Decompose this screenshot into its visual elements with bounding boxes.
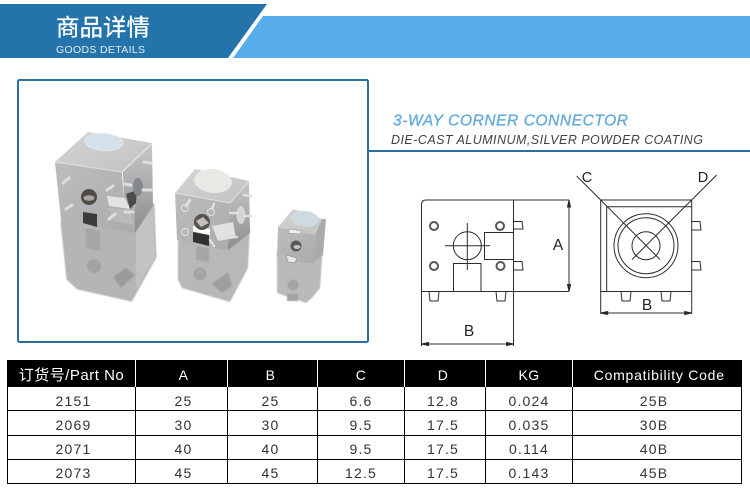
dimension B arrow bbox=[601, 312, 692, 314]
specification table: 25B bbox=[640, 393, 668, 409]
specification table: 25 bbox=[174, 393, 192, 409]
medium connector bbox=[175, 167, 251, 250]
specification table: 40 bbox=[174, 441, 192, 457]
small connector bbox=[277, 209, 326, 263]
label A: A bbox=[553, 237, 564, 254]
specification table: Compatibility Code bbox=[594, 367, 725, 383]
specification table: 6.6 bbox=[349, 393, 373, 409]
body outline bbox=[601, 200, 692, 292]
label B: B bbox=[464, 323, 474, 340]
heading: product name: 3-WAY CORNER CONNECTOR bbox=[393, 112, 628, 130]
pins bbox=[429, 222, 523, 301]
specification table: 17.5 bbox=[427, 465, 459, 481]
body outline bbox=[422, 200, 514, 292]
specification table: 12.5 bbox=[345, 465, 377, 481]
large connector bbox=[55, 132, 153, 233]
label D: D bbox=[698, 170, 708, 186]
specification table: 2151 bbox=[56, 393, 91, 409]
dimension B arrow bbox=[422, 342, 514, 346]
specification table: 30B bbox=[640, 417, 668, 433]
specification table: 25 bbox=[262, 393, 279, 409]
inner edges bbox=[607, 207, 692, 292]
centre crosshair bbox=[445, 223, 490, 270]
specification table: C bbox=[356, 367, 366, 383]
dimension A arrow bbox=[568, 200, 570, 292]
concentric circles bbox=[614, 214, 678, 278]
specification table: 45 bbox=[262, 465, 279, 481]
specification table: 0.114 bbox=[509, 441, 549, 457]
mounting holes bbox=[430, 222, 504, 270]
specification table: 30 bbox=[262, 417, 279, 433]
specification table: 45B bbox=[640, 465, 668, 481]
dark blue title bar bbox=[0, 4, 267, 58]
specification table bbox=[7, 360, 742, 484]
leader lines C and D bbox=[577, 175, 717, 260]
specification table: 12.8 bbox=[427, 393, 459, 409]
extension lines bbox=[601, 292, 692, 314]
specification table: 2071 bbox=[56, 441, 91, 457]
specification table: 45 bbox=[174, 465, 192, 481]
specification table: A bbox=[179, 367, 188, 383]
label B top view: B bbox=[642, 297, 652, 314]
specification table: 0.024 bbox=[508, 393, 550, 409]
centre hole bbox=[453, 232, 481, 260]
specification table: KG bbox=[518, 367, 540, 383]
small connector reflection bbox=[277, 245, 323, 303]
large connector reflection bbox=[62, 205, 155, 300]
specification table: 0.143 bbox=[508, 465, 550, 481]
diagram: top view bbox=[577, 175, 717, 314]
specification table: 9.5 bbox=[349, 417, 373, 433]
panel frame bbox=[18, 80, 368, 342]
diagram: side view bbox=[422, 200, 570, 346]
label C: C bbox=[582, 170, 592, 186]
specification table: D bbox=[438, 367, 448, 383]
specification table: 17.5 bbox=[427, 417, 459, 433]
specification table: B bbox=[266, 367, 275, 383]
subheading: material: DIE-CAST ALUMINUM,SILVER POWDER COATING bbox=[391, 133, 703, 147]
title: 商品详情 bbox=[56, 14, 150, 40]
light blue bar bbox=[233, 16, 750, 58]
specification table: 订货号/Part No bbox=[19, 367, 124, 384]
extension lines bbox=[422, 200, 569, 346]
specification table: 0.035 bbox=[508, 417, 550, 433]
side slot bbox=[484, 232, 514, 260]
specification table: 40B bbox=[640, 441, 668, 457]
divider line bbox=[368, 150, 750, 152]
specification table: 2069 bbox=[56, 417, 91, 433]
specification table: 9.5 bbox=[349, 441, 373, 457]
specification table: 40 bbox=[262, 441, 279, 457]
header banner bbox=[0, 4, 750, 58]
bottom slot bbox=[454, 264, 481, 292]
medium connector reflection bbox=[178, 225, 250, 302]
subtitle: GOODS DETAILS bbox=[56, 44, 145, 56]
specification table: 30 bbox=[174, 417, 192, 433]
panel: product photo bbox=[18, 80, 368, 342]
pins bbox=[621, 222, 701, 301]
specification table: 17.5 bbox=[427, 441, 459, 457]
specification table: 2073 bbox=[56, 465, 91, 481]
